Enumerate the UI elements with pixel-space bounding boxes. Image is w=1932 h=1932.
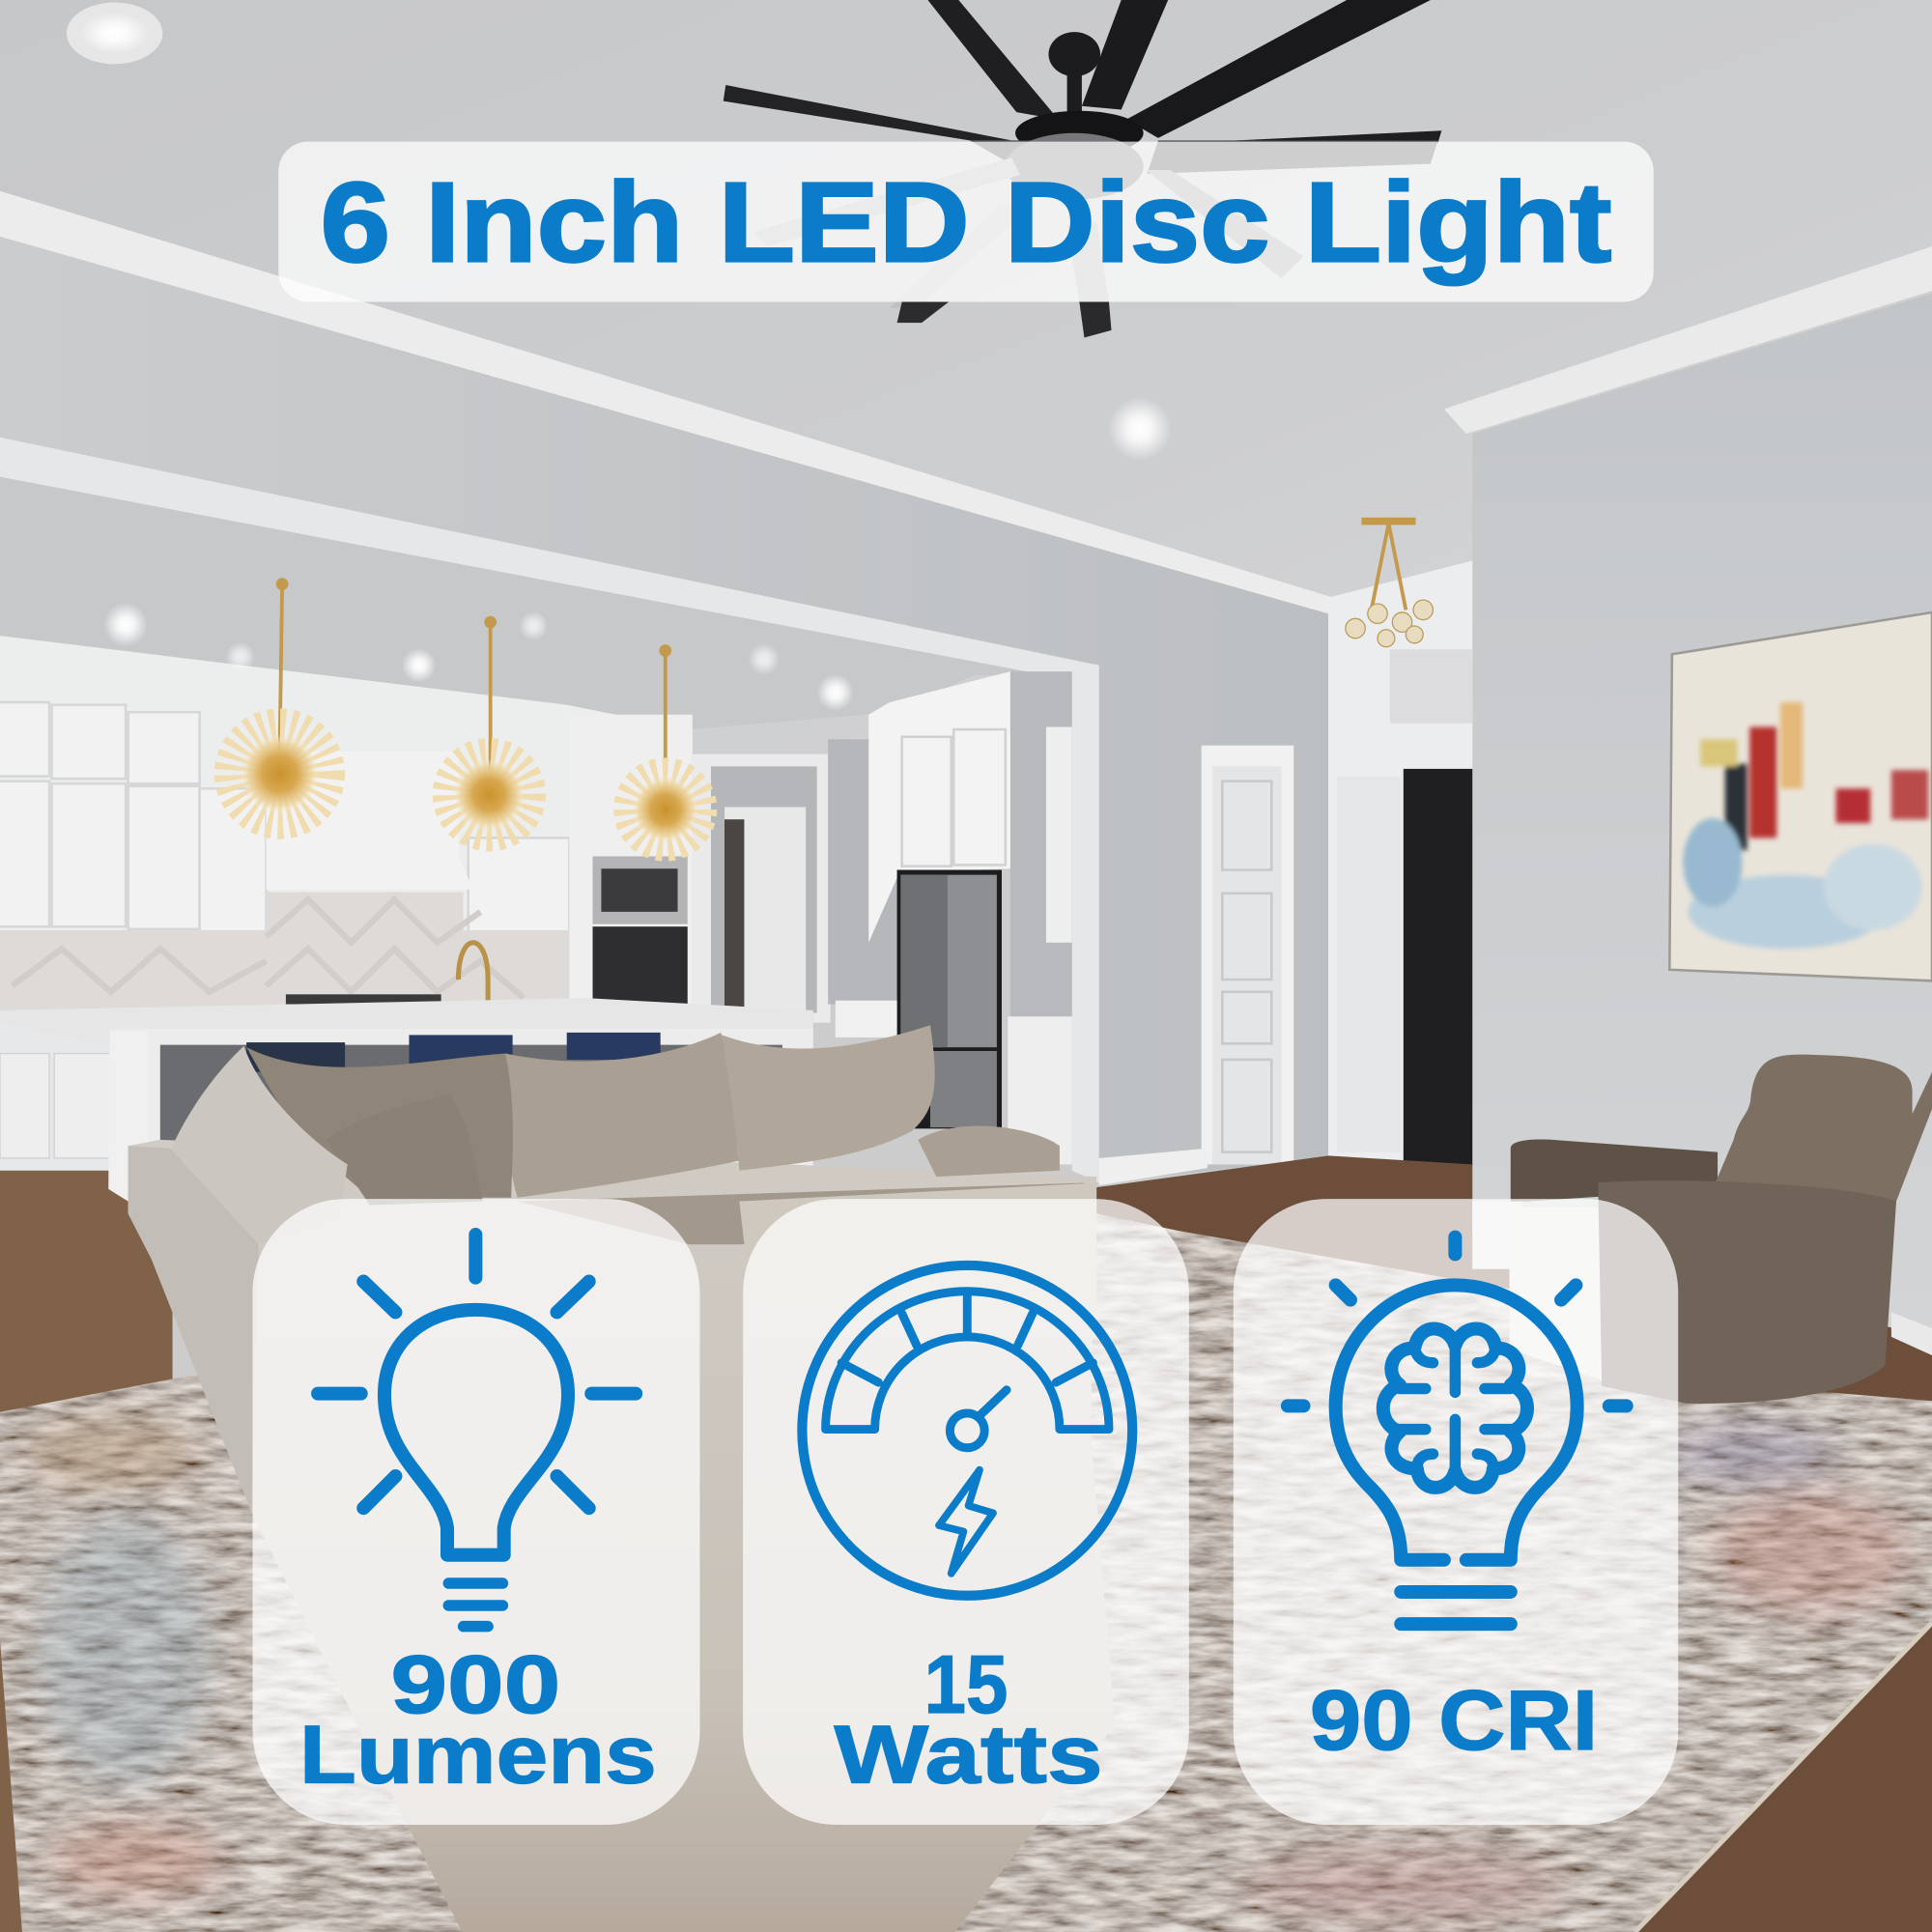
right crown moulding: [1444, 246, 1932, 434]
wood floor: [0, 1155, 1932, 1932]
ceiling: [0, 0, 1932, 764]
painting: [1669, 612, 1932, 980]
white hallway door: [1202, 746, 1293, 1164]
island: [111, 1029, 813, 1177]
right wall: [1472, 294, 1932, 1343]
panel: 900 lumens: [252, 1199, 699, 1825]
lower side cabinets: [836, 1001, 897, 1037]
herringbone backsplash: [0, 892, 569, 1011]
stainless fridge: [897, 870, 1002, 1128]
fridge cabinet: [868, 671, 1010, 943]
label: Watts: Watts: [835, 1710, 1103, 1802]
kitchen ceiling: [0, 474, 1078, 729]
side wall by fridge: [1010, 671, 1072, 1016]
dark doorway: [1404, 769, 1472, 1166]
label: 900: 900: [390, 1639, 560, 1731]
label: 90 CRI: 90 CRI: [1310, 1672, 1598, 1768]
opening trim: [0, 438, 1099, 1182]
gold faucet: [458, 943, 488, 1016]
icon: power gauge with lightning bolt: [802, 1265, 1132, 1596]
label: 15: 15: [924, 1639, 1008, 1731]
sofa lower body: [128, 1140, 1115, 1932]
wall baseboard right: [1891, 1312, 1932, 1355]
recessed lights: [67, 3, 1172, 711]
side pillows: [246, 1047, 513, 1198]
white column and alcove: [1328, 560, 1472, 1164]
rug edge trim: [1635, 1623, 1932, 1932]
label: Lumens: Lumens: [299, 1710, 657, 1802]
icon: light bulb with brain: [1288, 1237, 1627, 1624]
gold pendants: [241, 518, 1433, 842]
panel: 90 CRI: [1234, 1199, 1678, 1825]
baseboard: [1099, 1149, 1208, 1185]
panel: 15 watts: [743, 1199, 1189, 1825]
fan blades behind title panel: [1148, 140, 1438, 174]
rug: [0, 1213, 1932, 1932]
cabinet doors: [0, 702, 569, 934]
heading: 6 Inch LED Disc Light: [321, 158, 1611, 285]
back cushion two: [722, 1025, 935, 1171]
kitchen wall and upper cabinets: [0, 636, 690, 1023]
pantry doorway: [693, 754, 831, 1023]
island end panel: [108, 1032, 148, 1213]
ceiling fan: [724, 0, 1441, 337]
lower fan blade tips: [897, 301, 949, 323]
sofa armrest: [918, 1126, 1060, 1177]
countertops: [0, 998, 813, 1047]
beam wall above kitchen opening: [0, 234, 1328, 1182]
sofa: [108, 1025, 1115, 1932]
grey back wall: [828, 739, 902, 1005]
sofa seat: [518, 1182, 1084, 1244]
back cushion one: [505, 1033, 739, 1198]
title panel: [278, 142, 1654, 301]
leather armchair: [1511, 1055, 1932, 1404]
left crown moulding: [0, 191, 1333, 613]
tall oven cabinet: [569, 715, 693, 1023]
range hood: [267, 752, 473, 890]
left lower cabinets: [0, 1020, 113, 1175]
white baseboard behind chair: [1472, 1202, 1521, 1269]
rug colour washes: [25, 1417, 1910, 1922]
sofa shadow left: [128, 1146, 259, 1512]
icon: glowing light bulb: [318, 1235, 636, 1627]
cooktop: [286, 994, 441, 1005]
microwave and oven: [593, 856, 688, 1008]
rear cushion: [739, 1182, 1096, 1319]
white chair-side object: [1509, 1208, 1602, 1380]
